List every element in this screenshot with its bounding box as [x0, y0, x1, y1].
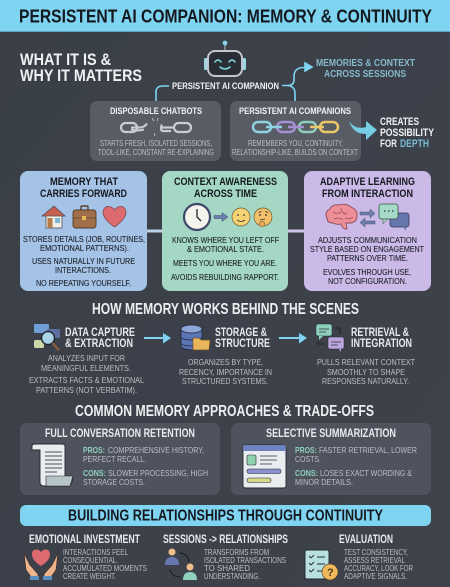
- panel: context awareness across time: MEETS YOU WHERE YOU ARE.: [173, 258, 277, 268]
- panel: memory that carries forward: EMOTIONAL PATTERNS).: [40, 243, 129, 253]
- step: retrieval and integration: PULLS RELEVANT CONTEXT: [317, 357, 415, 367]
- column: evaluation: [305, 534, 413, 581]
- step: retrieval and integration: INTEGRATION: [351, 338, 412, 350]
- icon: chat bubbles with magnifier: [34, 324, 60, 350]
- column: evaluation: ASSESS RETRIEVAL: [344, 555, 405, 565]
- icon: connected chain: [253, 122, 338, 132]
- icon: clock: [184, 204, 210, 230]
- column: sessions to relationships: UNDERSTANDING.: [204, 571, 260, 581]
- section heading: what it is: WHAT IT IS &: [20, 50, 111, 69]
- panel: selective summarization: FASTER RETRIEVAL, LOWER: [319, 445, 417, 455]
- column: evaluation: ACCURACY, LOOK FOR: [344, 563, 413, 573]
- callout: creates possibility for depth: FOR: [380, 138, 397, 150]
- panel: selective summarization: MINOR DETAILS.: [295, 477, 353, 487]
- panel: disposable chatbots: DISPOSABLE CHATBOTS: [110, 106, 202, 116]
- panel: adaptive learning from interaction: ADJUSTS COMMUNICATION: [318, 235, 417, 245]
- panel: selective summarization: LOSES EXACT WORDING &: [320, 468, 412, 478]
- heading: common memory approaches: COMMON MEMORY APPROACHES & TRADE-OFFS: [75, 403, 374, 420]
- panel: full conversation retention: COMPREHENSIVE HISTORY,: [108, 445, 204, 455]
- panel: adaptive learning from interaction: ADAPTIVE LEARNING: [320, 176, 415, 188]
- panel: disposable chatbots: TOOL-LIKE, CONSTANT RE-EXPLAINING: [98, 147, 214, 157]
- panel: context awareness across time: ACROSS TIME: [194, 188, 257, 200]
- icon: robot companion: [204, 41, 246, 76]
- callout: creates possibility for depth: POSSIBILITY: [380, 127, 435, 139]
- column: emotional investment: CONSEQUENTIAL.: [63, 555, 118, 565]
- panel: adaptive learning from interaction: EVOLVES THROUGH USE,: [323, 267, 411, 277]
- icon: database with folder: [181, 325, 210, 350]
- step: storage and structure: RECENCY, IMPORTANCE IN: [179, 367, 272, 377]
- column: emotional investment: EMOTIONAL INVESTMENT: [29, 534, 140, 546]
- step: storage and structure: STORAGE &: [215, 327, 267, 339]
- step: data capture and extraction: EXTRACTS FACTS & EMOTIONAL: [29, 375, 144, 385]
- panel: full conversation retention: [20, 423, 220, 495]
- panel: full conversation retention: PROS:: [83, 445, 105, 455]
- icon: briefcase: [73, 206, 96, 228]
- connector: blue to green card: [147, 230, 162, 232]
- icon: smiling face: [232, 208, 250, 226]
- step: storage and structure: STRUCTURED SYSTEMS.: [182, 376, 268, 386]
- callout: memories and context: [316, 58, 416, 80]
- panel: adaptive learning from interaction: NOT CONFIGURATION.: [328, 276, 407, 286]
- panel: selective summarization: PROS:: [295, 445, 317, 455]
- step: storage and structure: STRUCTURE: [215, 338, 270, 350]
- arrow: creates possibility: [349, 121, 377, 140]
- icon: exchanging bubbles: [316, 324, 344, 352]
- callout: memories and context: ACROSS SESSIONS: [324, 69, 406, 80]
- panel: memory that carries forward: STORES DETAILS (JOB, ROUTINES,: [23, 234, 145, 244]
- arrow: capture to storage: [144, 333, 171, 344]
- step: data capture and extraction: MEANINGFUL ELEMENTS.: [41, 363, 131, 373]
- panel: persistent AI companions: [230, 101, 361, 161]
- panel: selective summarization: SELECTIVE SUMMARIZATION: [266, 428, 396, 440]
- icon: broken chain: [121, 118, 191, 136]
- callout: creates possibility for depth: [380, 116, 435, 150]
- icon: hands holding heart: [24, 550, 58, 580]
- panel: full conversation retention: SLOWER PROCESSING, HIGH: [108, 468, 208, 478]
- panel: memory that carries forward: MEMORY THAT: [50, 176, 118, 188]
- panel: context awareness across time: KNOWS WHERE YOU LEFT OFF: [172, 235, 279, 245]
- connector: green to purple card: [288, 230, 304, 232]
- heading band: building relationships: BUILDING RELATIONSHIPS THROUGH CONTINUITY: [68, 508, 384, 524]
- column: sessions to relationships: SESSIONS -> RELATIONSHIPS: [163, 534, 288, 546]
- column: emotional investment: [24, 534, 147, 581]
- callout: creates possibility for depth: CREATES: [380, 116, 419, 128]
- step: retrieval and integration: SMOOTHLY TO SHAPE: [327, 367, 405, 377]
- callout: memories and context: MEMORIES & CONTEXT: [316, 58, 416, 69]
- column: emotional investment: CREATE WEIGHT.: [63, 571, 116, 581]
- arrow: clock to faces: [214, 212, 228, 222]
- panel: context awareness across time: [162, 171, 288, 291]
- section heading: what it is: WHY IT MATTERS: [20, 66, 142, 85]
- panel: memory that carries forward: USES NATURALLY IN FUTURE: [32, 256, 135, 266]
- section heading: what it is: [20, 50, 142, 85]
- column: sessions to relationships: [163, 534, 288, 581]
- panel: selective summarization: [231, 423, 431, 495]
- label: persistent AI companion: PERSISTENT AI COMPANION: [172, 81, 279, 92]
- panel: persistent AI companions: RELATIONSHIP-LIKE, BUILDS ON CONTEXT: [232, 147, 358, 157]
- panel: full conversation retention: CONS:: [83, 468, 106, 478]
- step: data capture and extraction: & EXTRACTION: [65, 338, 133, 350]
- icon: two people cycle: [165, 548, 197, 580]
- panel: context awareness across time: AVOIDS REBUILDING RAPPORT.: [171, 272, 279, 282]
- header band: [0, 0, 450, 32]
- icon: scroll: [32, 444, 73, 486]
- heading: how memory works: HOW MEMORY WORKS BEHIND THE SCENES: [92, 301, 359, 318]
- panel: selective summarization: COSTS.: [295, 454, 321, 464]
- column: emotional investment: ACCUMULATED MOMENTS: [63, 563, 147, 573]
- column: sessions to relationships: ISOLATED TRANSACTIONS: [204, 555, 286, 565]
- arrow: storage to retrieval: [279, 333, 307, 344]
- icon: summary window: [243, 445, 286, 488]
- panel: context awareness across time: CONTEXT AWARENESS: [174, 176, 277, 188]
- panel: memory that carries forward: [20, 171, 147, 291]
- step: data capture and extraction: ANALYZES INPUT FOR: [48, 353, 125, 363]
- icon: house: [42, 206, 65, 228]
- step: data capture and extraction: [29, 324, 144, 395]
- step: data capture and extraction: DATA CAPTURE: [65, 327, 135, 339]
- step: retrieval and integration: RETRIEVAL &: [351, 327, 409, 339]
- icon: brain: [326, 204, 357, 229]
- panel: memory that carries forward: CARRIES FORWARD: [40, 188, 127, 200]
- panel: persistent AI companions: PERSISTENT AI COMPANIONS: [239, 106, 351, 116]
- column: emotional investment: INTERACTIONS FEEL: [63, 547, 128, 557]
- column: evaluation: EVALUATION: [339, 534, 393, 546]
- panel: adaptive learning from interaction: STYLE BASED ON ENGAGEMENT: [310, 244, 424, 254]
- step: retrieval and integration: [316, 324, 415, 386]
- step: storage and structure: [179, 325, 272, 386]
- panel: adaptive learning from interaction: FROM INTERACTION: [322, 188, 413, 200]
- arrow: branch to memories: [282, 63, 312, 101]
- panel: adaptive learning from interaction: [304, 171, 431, 291]
- icon: thinking face: [254, 208, 272, 227]
- step: data capture and extraction: PATTERNS (NOT VERBATIM).: [36, 385, 137, 395]
- panel: disposable chatbots: [90, 101, 221, 161]
- step: retrieval and integration: RESPONSES NATURALLY.: [322, 376, 409, 386]
- panel: adaptive learning from interaction: PATTERNS OVER TIME.: [327, 253, 408, 263]
- callout: creates possibility for depth: DEPTH: [400, 138, 429, 150]
- panel: disposable chatbots: STARTS FRESH, ISOLATED SESSIONS,: [100, 138, 212, 148]
- connector: left branch: [156, 86, 169, 101]
- icon: heart: [103, 206, 126, 227]
- column: evaluation: TEST CONSISTENCY,: [344, 547, 408, 557]
- panel: memory that carries forward: NO REPEATING YOURSELF.: [36, 278, 131, 288]
- column: evaluation: ADAPTIVE SIGNALS.: [344, 571, 407, 581]
- step: storage and structure: ORGANIZES BY TYPE,: [188, 357, 263, 367]
- panel: full conversation retention: FULL CONVERSATION RETENTION: [45, 428, 195, 440]
- panel: full conversation retention: PERFECT RECALL.: [83, 454, 146, 464]
- panel: persistent AI companions: REMEMBERS YOU, CONTINUITY,: [248, 138, 343, 148]
- panel: selective summarization: CONS:: [295, 468, 318, 478]
- heading band: building relationships: [20, 505, 431, 526]
- column: sessions to relationships: TO SHARED: [204, 563, 250, 573]
- icon: chat bubbles: [379, 204, 409, 231]
- column: sessions to relationships: TRANSFORMS FROM: [204, 547, 269, 557]
- icon: exchange arrows: [360, 209, 375, 227]
- panel: full conversation retention: STORAGE COSTS.: [83, 477, 145, 487]
- panel: memory that carries forward: INTERACTIONS.: [55, 265, 111, 275]
- icon: checklist with question mark: ?: [327, 567, 334, 579]
- panel: context awareness across time: & EMOTIONAL STATE.: [187, 244, 264, 254]
